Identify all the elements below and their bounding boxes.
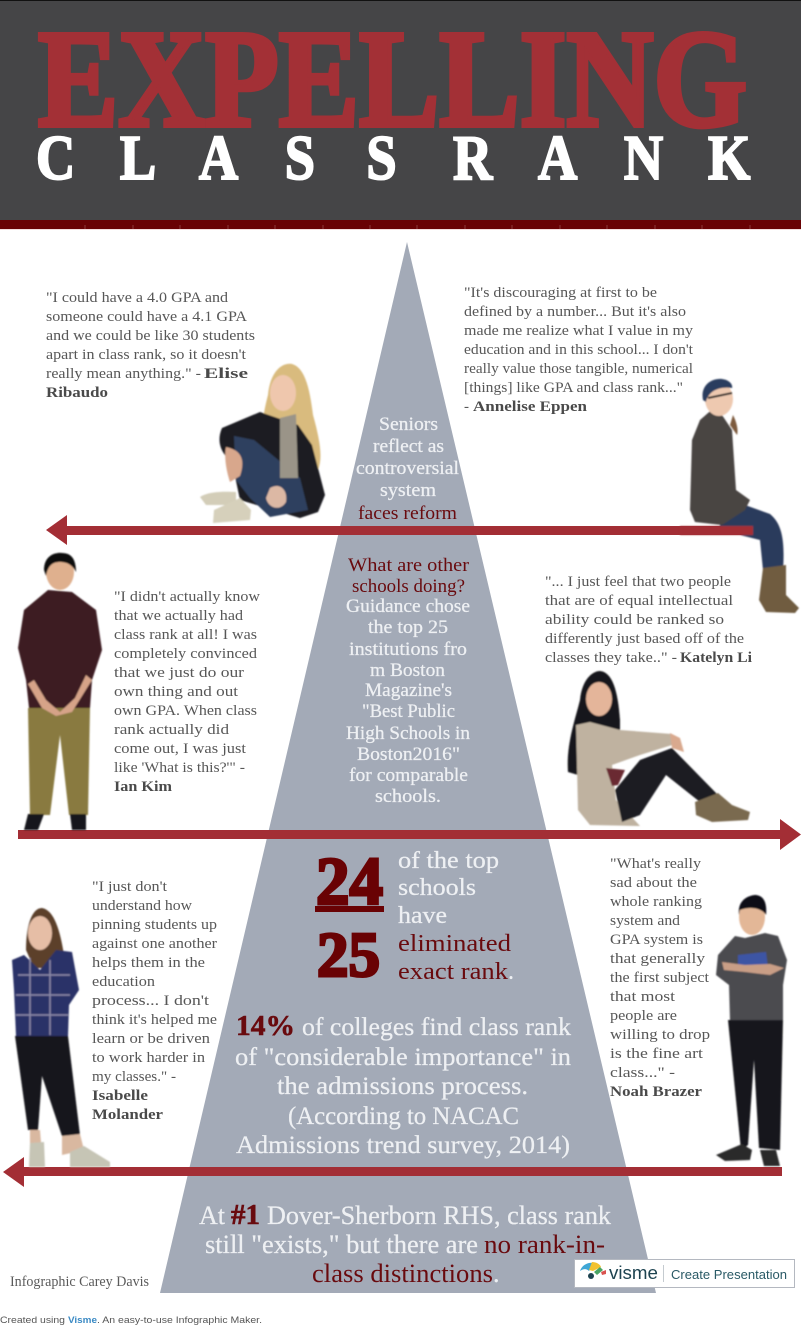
stat: 24 of 25 schools: .: [508, 959, 514, 985]
quote: Annelise Eppen: [464, 285, 694, 415]
arrow: bottom, pointing left: [3, 1157, 782, 1187]
number 24: 24: [316, 843, 383, 919]
stat: 14 percent of colleges: of "considerable importance" in: [235, 1044, 572, 1071]
quote: Katelyn Li: ability could be ranked so: [545, 612, 724, 628]
pyramid text: what are other schools doing: Guidance chose: [346, 597, 470, 617]
stat: 14 percent of colleges: (According to NACAC: [288, 1103, 519, 1130]
quote: Katelyn Li: that are of equal intellectual: [545, 593, 733, 609]
quote: Annelise Eppen: "It's discouraging at first to be: [464, 285, 657, 301]
footer: created using visme: . An easy-to-use Infographic Maker.: [97, 1315, 262, 1326]
fact: Dover-Sherborn: still "exists," but there are: [205, 1230, 478, 1259]
quote: Katelyn Li: [545, 574, 752, 666]
quote: Isabelle Molander: [92, 879, 217, 1123]
header banner: [0, 0, 801, 230]
fact: Dover-Sherborn: .: [493, 1259, 500, 1288]
quote: Elise Ribaudo: someone could have a 4.1 GPA: [46, 309, 247, 325]
credit: infographic author: Infographic Carey Davis: [10, 1274, 149, 1290]
photo: Katelyn Li sitting: [568, 671, 750, 826]
quote: Isabelle Molander: "I just don't: [92, 879, 168, 895]
quote: Noah Brazer: people are: [610, 1008, 677, 1024]
quote: Isabelle Molander: helps them in the: [92, 955, 205, 971]
quote: Isabelle Molander: understand how: [92, 898, 192, 914]
quote: Elise Ribaudo: apart in class rank, so it doesn't: [46, 347, 247, 363]
quote: Isabelle Molander: Isabelle: [92, 1088, 148, 1104]
pyramid text: what are other schools doing: "Best Public: [362, 702, 455, 722]
quote: Annelise Eppen: made me realize what I value in my: [464, 323, 694, 339]
quote: Ian Kim: Ian Kim: [114, 779, 173, 795]
photo: Elise Ribaudo sitting: [200, 364, 325, 523]
pyramid text: what are other schools doing: for comparable: [349, 766, 468, 786]
quote: Katelyn Li: classes they take.." -: [545, 650, 677, 666]
quote: Elise Ribaudo: and we could be like 30 students: [46, 328, 255, 344]
pyramid text: what are other schools doing: schools doing?: [352, 577, 465, 597]
quote: Ian Kim: that we just do our: [114, 665, 244, 681]
quote: Noah Brazer: system and: [610, 913, 681, 929]
quote: Isabelle Molander: education: [92, 974, 156, 990]
quote: Noah Brazer: [610, 856, 710, 1100]
pyramid text: what are other schools doing: [346, 556, 470, 807]
quote: Elise Ribaudo: Ribaudo: [46, 385, 108, 401]
quote: Elise Ribaudo: really mean anything." -: [46, 366, 201, 382]
pyramid text: seniors reflect: Seniors: [379, 415, 438, 435]
fact: Dover-Sherborn: no rank-in-: [484, 1230, 605, 1259]
number 25: 25: [317, 919, 380, 990]
stat: 14 percent of colleges: of colleges find class rank: [302, 1014, 572, 1041]
pyramid text: what are other schools doing: High Schools in: [346, 724, 470, 744]
quote: Isabelle Molander: think it's helped me: [92, 1012, 217, 1028]
stat: 24 of 25 schools: have: [398, 903, 447, 929]
quote: Annelise Eppen: education and in this school... I don't: [464, 342, 694, 358]
quote: Elise Ribaudo: "I could have a 4.0 GPA and: [46, 290, 229, 306]
quote: Isabelle Molander: Molander: [92, 1107, 163, 1123]
quote: Annelise Eppen: -: [464, 399, 469, 415]
footer: created using visme: [0, 1315, 262, 1326]
photo: Noah Brazer standing: [716, 895, 787, 1166]
footer: created using visme: Visme: [68, 1315, 97, 1326]
quote: Noah Brazer: sad about the: [610, 875, 697, 891]
stat: 14 percent of colleges: 14%: [236, 1010, 295, 1042]
pyramid text: what are other schools doing: institutions fro: [349, 640, 467, 660]
quote: Elise Ribaudo: Elise: [204, 366, 248, 382]
quote: Noah Brazer: the first subject: [610, 970, 710, 986]
quote: Katelyn Li: differently just based off of the: [545, 631, 744, 647]
fact: Dover-Sherborn: class distinctions: [312, 1259, 493, 1288]
pyramid text: what are other schools doing: m Boston: [370, 661, 445, 681]
pyramid text: seniors reflect: reflect as: [373, 437, 444, 457]
arrow: middle, pointing right: [18, 819, 801, 850]
pyramid text: what are other schools doing: Magazine's: [365, 681, 452, 701]
quote: Noah Brazer: that generally: [610, 951, 706, 967]
quote: Isabelle Molander: against one another: [92, 936, 217, 952]
quote: Noah Brazer: is the fine art: [610, 1046, 704, 1062]
pyramid text: seniors reflect: faces reform: [358, 504, 458, 524]
quote: Ian Kim: "I didn't actually know: [114, 589, 260, 605]
central pyramid: [160, 242, 656, 1293]
photo: Annelise Eppen sitting on arrow: [680, 379, 799, 613]
quote: Isabelle Molander: learn or be driven: [92, 1031, 211, 1047]
pyramid text: what are other schools doing: schools.: [375, 787, 441, 807]
quote: Ian Kim: like 'What is this?'" -: [114, 760, 245, 776]
quote: Annelise Eppen: really value those tangible, numerical: [464, 361, 693, 377]
stat: 24 of 25 schools: eliminated: [398, 931, 511, 957]
pyramid text: what are other schools doing: Boston2016": [357, 745, 460, 765]
fact: Dover-Sherborn: #1: [231, 1199, 260, 1231]
quote: Ian Kim: own GPA. When class: [114, 703, 257, 719]
pyramid text: seniors reflect: [356, 415, 459, 524]
quote: Noah Brazer: that most: [610, 989, 676, 1005]
stat: 24 of 25 schools: [315, 843, 514, 990]
pyramid text: seniors reflect: controversial: [356, 459, 459, 479]
fact: Dover-Sherborn: [199, 1199, 611, 1288]
quote: Isabelle Molander: pinning students up: [92, 917, 217, 933]
stat: 14 percent of colleges: [235, 1010, 572, 1159]
quote: Annelise Eppen: [things] like GPA and class rank...": [464, 380, 683, 396]
quote: Ian Kim: own thing and out: [114, 684, 239, 700]
pyramid text: what are other schools doing: What are other: [348, 556, 469, 576]
quote: Ian Kim: rank actually did: [114, 722, 230, 738]
fact: Dover-Sherborn: Dover-Sherborn RHS, class rank: [267, 1201, 611, 1230]
icon: visme logo: [580, 1262, 606, 1279]
quote: Isabelle Molander: to work harder in: [92, 1050, 206, 1066]
pyramid text: seniors reflect: system: [380, 481, 437, 501]
quote: Isabelle Molander: process... I don't: [92, 993, 210, 1009]
stat: 14 percent of colleges: Admissions trend survey, 2014): [236, 1132, 570, 1159]
quote: Ian Kim: come out, I was just: [114, 741, 247, 757]
quote: Ian Kim: completely convinced: [114, 646, 258, 662]
quote: Annelise Eppen: defined by a number... But it's also: [464, 304, 686, 320]
quote: Katelyn Li: Katelyn Li: [680, 650, 752, 666]
quote: Ian Kim: that we actually had: [114, 608, 244, 624]
quote: Noah Brazer: class..." -: [610, 1065, 675, 1081]
stat: 24 of 25 schools: schools: [398, 875, 476, 901]
stat: 24 of 25 schools: exact rank: [398, 959, 508, 985]
quote: Katelyn Li: "... I just feel that two people: [545, 574, 731, 590]
arrow: top, pointing left: [46, 515, 753, 545]
visme badge: Create Presentation: [671, 1267, 787, 1282]
quote: Ian Kim: class rank at all! I was: [114, 627, 257, 643]
quote: Ian Kim: [114, 589, 260, 795]
quote: Noah Brazer: Noah Brazer: [610, 1084, 702, 1100]
stat: 14 percent of colleges: the admissions process.: [277, 1073, 528, 1100]
photo: Isabelle Molander standing: [12, 908, 110, 1167]
fact: Dover-Sherborn: At: [199, 1201, 226, 1230]
footer: created using visme: Created using: [0, 1315, 65, 1326]
visme badge: visme: [609, 1263, 658, 1283]
pyramid text: what are other schools doing: the top 25: [368, 618, 448, 638]
quote: Noah Brazer: GPA system is: [610, 932, 703, 948]
quote: Isabelle Molander: my classes." -: [92, 1069, 176, 1085]
quote: Elise Ribaudo: [46, 290, 255, 401]
photo: Ian Kim standing: [18, 553, 102, 830]
quote: Noah Brazer: "What's really: [610, 856, 702, 872]
quote: Noah Brazer: whole ranking: [610, 894, 703, 910]
quote: Annelise Eppen: Annelise Eppen: [473, 399, 588, 415]
stat: 24 of 25 schools: of the top: [398, 848, 499, 874]
title: class rank: CLASS RANK: [36, 122, 750, 193]
quote: Noah Brazer: willing to drop: [610, 1027, 710, 1043]
visme badge: [574, 1260, 794, 1288]
